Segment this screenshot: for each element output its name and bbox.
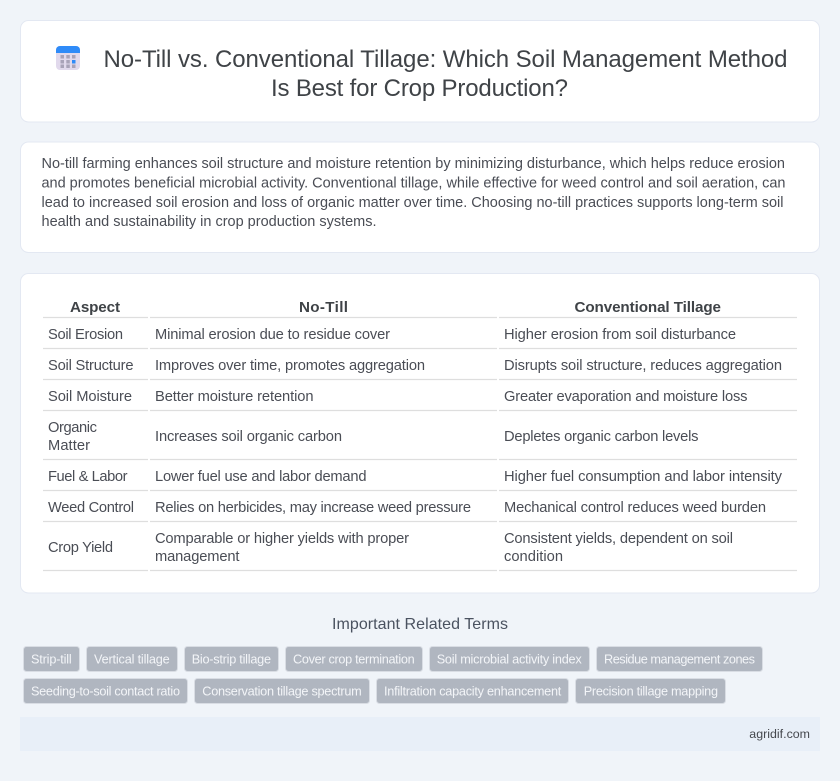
row: crop yield: management [155,549,240,565]
row: organic matter: Depletes organic carbon levels [504,429,698,445]
row: soil moisture: Soil Moisture [48,389,132,405]
row: organic matter: Organic [48,420,97,436]
row: crop yield: condition [504,549,563,565]
text block: description: No-till farming enhances soil structure and moisture retention by minimizing disturbance, which helps reduce erosion [42,156,785,172]
row: weed control: Weed Control [48,500,134,516]
row: organic matter: Increases soil organic carbon [155,429,342,445]
tags: related terms: Infiltration capacity enhancement [384,685,562,699]
tags: related terms: Strip-till [31,652,72,666]
row: fuel and labor: Fuel & Labor [48,469,128,485]
row: soil erosion: Minimal erosion due to residue cover [155,327,390,343]
text block: description [42,156,786,230]
tags: related terms: Soil microbial activity index [437,652,582,666]
row: fuel and labor [48,469,783,485]
row: soil erosion: Soil Erosion [48,327,123,343]
tags: related terms: Vertical tillage [94,652,170,666]
title: No-Till vs. Conventional Tillage: Which Soil Management Method [104,46,788,73]
tags: related terms: Conservation tillage spectrum [202,685,362,699]
row: soil moisture: Greater evaporation and moisture loss [504,389,748,405]
row: crop yield [48,531,733,565]
row: crop yield: Crop Yield [48,540,113,556]
row: weed control [48,500,766,516]
tags: related terms: Seeding-to-soil contact ratio [31,685,180,699]
text block: description: and promotes beneficial microbial activity. Conventional tillage, while effective for weed control and soil aeration, can [42,176,786,192]
row: crop yield: Comparable or higher yields with proper [155,531,409,547]
title [104,46,788,102]
row: fuel and labor: Lower fuel use and labor demand [155,469,366,485]
panel: comparison table [20,274,820,593]
row: organic matter: Matter [48,438,90,454]
row: soil structure: Improves over time, promotes aggregation [155,358,425,374]
icon: calendar [56,46,80,70]
row: soil moisture [48,389,748,405]
row: soil moisture: Better moisture retention [155,389,314,405]
panel: description [20,142,820,252]
row: weed control: Mechanical control reduces weed burden [504,500,766,516]
heading: important related terms: Important Related Terms [332,616,508,633]
title: Is Best for Crop Production? [271,75,568,102]
row: fuel and labor: Higher fuel consumption and labor intensity [504,469,783,485]
row: soil structure [48,358,782,374]
tags: related terms [24,646,762,704]
table header: Conventional Tillage [574,299,721,316]
row: soil structure: Disrupts soil structure, reduces aggregation [504,358,782,374]
table header: No-Till [299,299,348,316]
footer: agridif.com [749,727,810,741]
row: crop yield: Consistent yields, dependent on soil [504,531,733,547]
tags: related terms: Residue management zones [604,652,755,666]
table header [70,299,721,316]
footer [20,717,820,751]
text block: description: health and sustainability in crop production systems. [42,214,376,230]
tags: related terms: Cover crop termination [293,652,415,666]
table header: Aspect [70,299,120,316]
text block: description: lead to increased soil erosion and loss of organic matter over time. Choosing no-till practices supports long-term soil [42,195,784,211]
row: soil erosion: Higher erosion from soil disturbance [504,327,736,343]
tags: related terms: Bio-strip tillage [192,652,271,666]
row: soil structure: Soil Structure [48,358,134,374]
tags: related terms: Precision tillage mapping [584,685,718,699]
row: weed control: Relies on herbicides, may increase weed pressure [155,500,471,516]
row: soil erosion [48,327,736,343]
row: organic matter [48,420,698,454]
panel: title card [20,20,820,122]
